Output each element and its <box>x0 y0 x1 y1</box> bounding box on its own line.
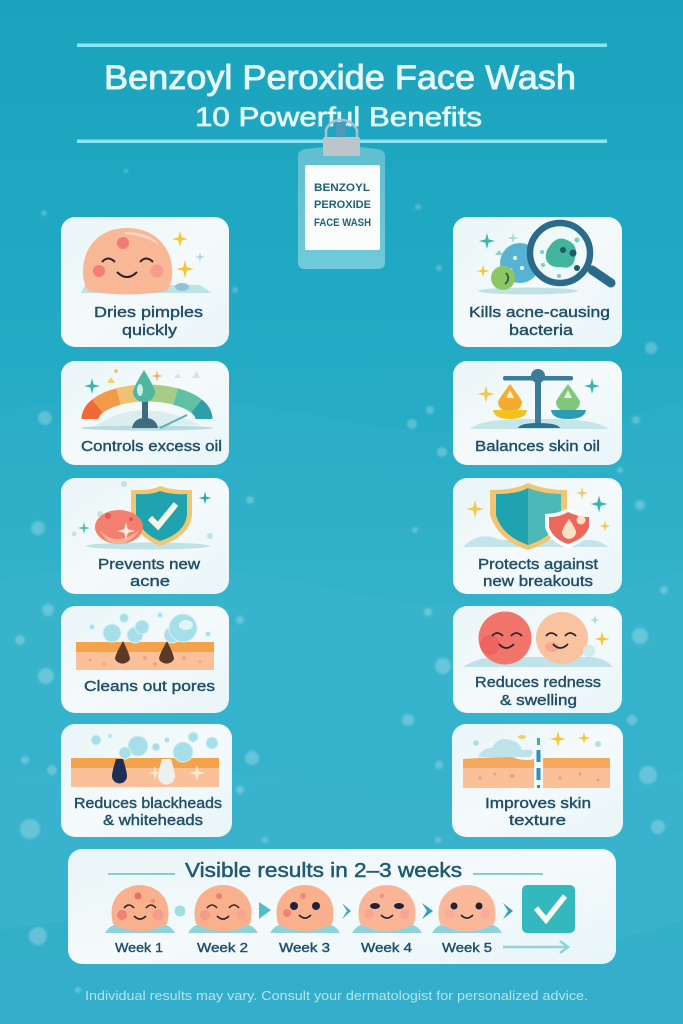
icon: oil gauge <box>81 369 213 430</box>
arrow <box>174 906 186 916</box>
caption: new breakouts <box>483 573 593 590</box>
week labels <box>115 940 492 955</box>
week labels: Week 5 <box>442 940 492 955</box>
bottle label text <box>314 182 371 229</box>
caption: Reduces redness <box>475 674 601 691</box>
panel: prevents new acne <box>61 478 229 594</box>
icon: smiling pimple face <box>81 228 212 294</box>
subtitle: 10 Powerful Benefits <box>195 102 482 132</box>
icon: check box <box>522 885 575 933</box>
face: week 4 <box>352 885 422 933</box>
caption: texture <box>509 812 566 829</box>
week labels: Week 2 <box>197 940 248 955</box>
caption: Controls excess oil <box>81 438 222 455</box>
caption: & whiteheads <box>103 812 203 829</box>
panel: reduces redness and swelling <box>453 606 622 713</box>
panel: visible results timeline <box>68 849 616 964</box>
caption <box>475 674 601 709</box>
caption: Balances skin oil <box>475 438 600 455</box>
caption: Improves skin <box>485 795 591 812</box>
panel: dries pimples <box>61 217 229 347</box>
panel: cleans out pores <box>61 606 229 713</box>
week labels: Week 4 <box>361 940 412 955</box>
caption <box>469 304 610 339</box>
caption: Reduces blackheads <box>74 795 222 812</box>
timeline heading: Visible results in 2–3 weeks <box>185 860 462 882</box>
icon: shield and red breakout badge <box>463 483 610 550</box>
bottle label text: PEROXIDE <box>314 199 371 211</box>
caption: Kills acne-causing <box>469 304 610 321</box>
panel: improves skin texture <box>452 724 623 837</box>
icon: magnifier over bacteria <box>476 223 611 294</box>
arrow <box>259 902 271 919</box>
week labels: Week 1 <box>115 940 163 955</box>
caption: & swelling <box>500 692 577 709</box>
caption: bacteria <box>509 322 574 339</box>
caption <box>98 556 200 590</box>
caption: Dries pimples <box>94 304 203 321</box>
panel: kills acne-causing bacteria <box>453 217 622 347</box>
arrow <box>503 903 513 919</box>
face: week 3 <box>270 885 340 933</box>
title: Benzoyl Peroxide Face Wash <box>104 59 576 97</box>
bottle label text: FACE WASH <box>314 217 371 229</box>
caption: Prevents new <box>98 556 200 573</box>
arrow <box>422 903 433 919</box>
icon: skin pores and bubbles <box>76 612 214 670</box>
icon: shield and pimple <box>72 481 213 550</box>
icon: blackhead and whitehead skin <box>71 732 219 787</box>
disclaimer: Individual results may vary. Consult your dermatologist for personalized advice. <box>85 988 588 1003</box>
panel: controls excess oil <box>61 361 229 465</box>
face: week 2 <box>188 885 258 933</box>
caption: Cleans out pores <box>84 678 215 695</box>
panel: protects against new breakouts <box>453 478 622 594</box>
caption: acne <box>130 573 170 590</box>
caption <box>485 795 591 829</box>
panel: reduces blackheads and whiteheads <box>61 724 232 837</box>
face: week 1 <box>105 885 175 933</box>
caption <box>94 304 203 339</box>
title block <box>77 44 607 143</box>
arrow: progress <box>503 941 568 953</box>
bottle label text: BENZOYL <box>314 182 370 194</box>
bottle <box>298 120 385 269</box>
arrow <box>342 903 351 919</box>
caption <box>478 556 599 590</box>
caption: quickly <box>122 322 178 339</box>
caption: Protects against <box>478 556 599 573</box>
icon: oil balance scale <box>470 369 608 429</box>
caption <box>74 795 222 829</box>
icon: red and calm faces <box>463 612 613 667</box>
icon: skin texture before and after <box>463 731 610 788</box>
panel: balances skin oil <box>453 361 622 465</box>
face: week 5 <box>432 885 502 933</box>
week labels: Week 3 <box>279 940 330 955</box>
